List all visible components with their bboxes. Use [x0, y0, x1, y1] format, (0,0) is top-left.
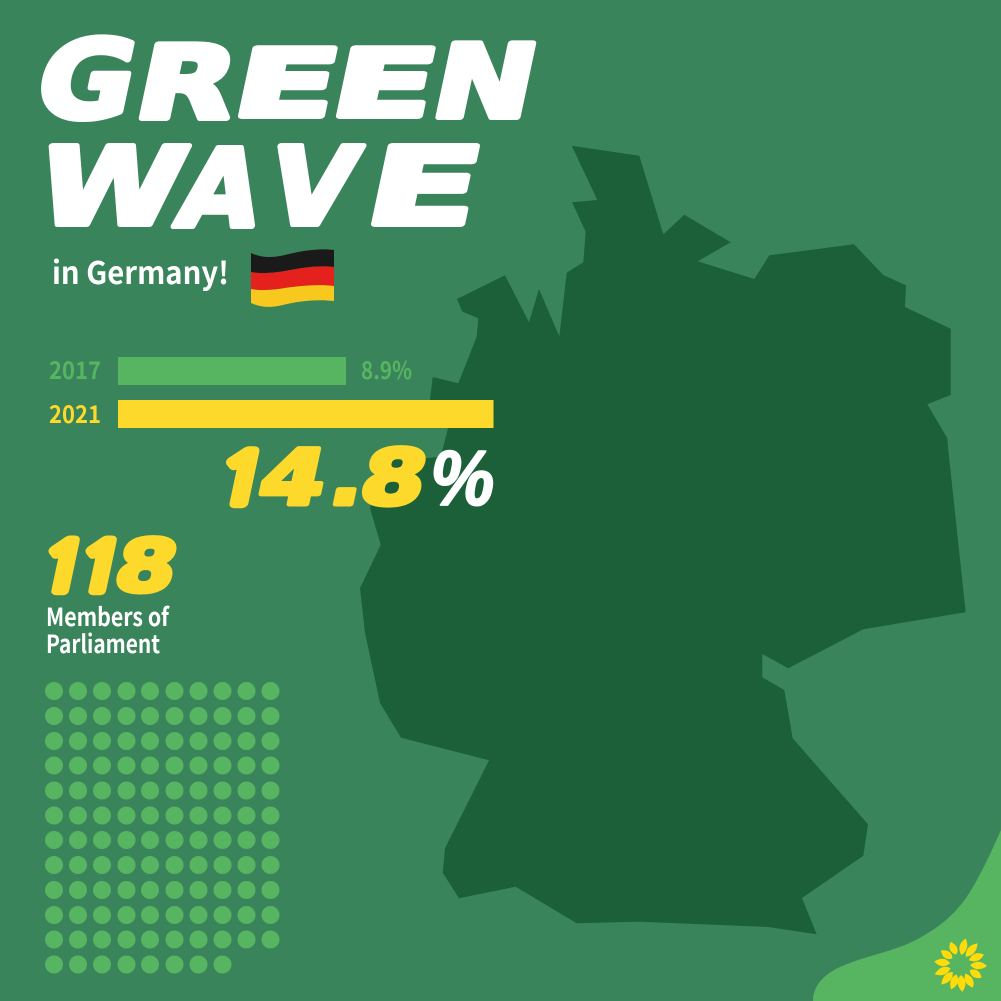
- seat count: 118: 1: [69, 535, 131, 602]
- 2017 label: 2017: [49, 351, 101, 386]
- 2021 label: 2021: [49, 395, 101, 430]
- title: [26, 18, 549, 252]
- seat caption: Members of: [46, 598, 170, 634]
- 2017 bar: [118, 357, 346, 385]
- title: E: [224, 31, 349, 139]
- title: W: [26, 125, 197, 250]
- 2021 value: 14.8%: .: [323, 435, 374, 523]
- title: R: [126, 25, 249, 143]
- subtitle: in Germany!: [52, 248, 229, 293]
- seat caption: [46, 598, 170, 661]
- icon: German flag: [251, 249, 334, 307]
- corner wave: [813, 830, 1001, 1001]
- title: A: [167, 127, 274, 252]
- bar chart: vote share: [49, 351, 494, 430]
- 2021 value: 14.8%: 8: [352, 435, 435, 523]
- seat count: 118: 1: [32, 535, 94, 602]
- 2021 value: 14.8%: [207, 434, 494, 523]
- title: V: [258, 125, 369, 250]
- title: G: [26, 18, 149, 143]
- title: N: [423, 24, 548, 142]
- seat caption: Parliament: [46, 625, 160, 661]
- dot grid: 118 seats: [45, 682, 280, 974]
- 2021 value: 14.8%: 4: [251, 435, 335, 523]
- title: E: [355, 125, 494, 250]
- map of Germany: [360, 146, 966, 934]
- title: E: [322, 31, 447, 139]
- 2021 bar: [118, 400, 494, 428]
- 2021 value: 14.8%: %: [431, 434, 494, 522]
- seat count: 118: 8: [108, 525, 185, 609]
- icon: sunflower logo: [933, 938, 987, 992]
- 2021 value: 14.8%: 1: [209, 445, 275, 515]
- 2017 value: 8.9%: [361, 351, 412, 386]
